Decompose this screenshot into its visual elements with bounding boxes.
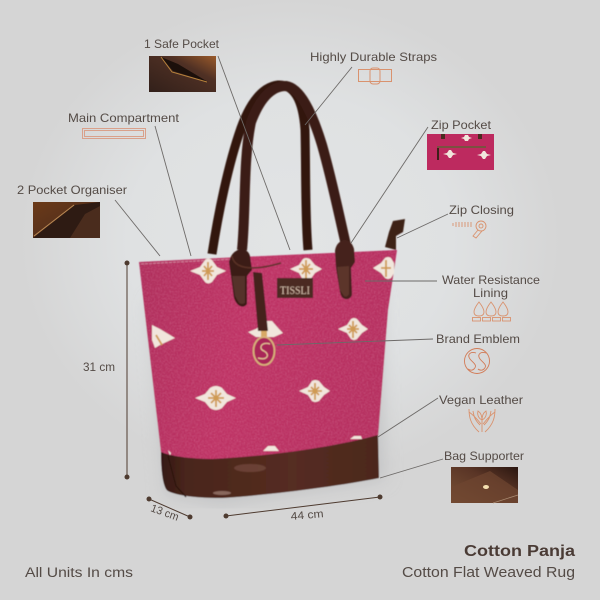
label: 2 Pocket Organiser: 2 Pocket Organiser xyxy=(17,183,127,197)
product title: Cotton Panja xyxy=(464,543,575,560)
front handle xyxy=(242,86,346,250)
zip pull xyxy=(385,219,405,250)
brand label xyxy=(277,278,313,298)
label: Main Compartment: Main Compartment xyxy=(68,111,180,125)
icon: hands and leaf xyxy=(469,409,495,432)
dimension: depth 13 cm xyxy=(146,496,192,520)
back handle xyxy=(212,85,308,254)
leather base xyxy=(161,435,379,498)
top seam xyxy=(141,259,235,264)
icon: water drops xyxy=(472,302,510,321)
label: Water Resistance Lining: Lining xyxy=(473,286,508,300)
label: Zip Closing: Zip Closing xyxy=(449,203,514,217)
label: Zip Pocket: Zip Pocket xyxy=(431,118,492,132)
text: 13 cm: 13 cm xyxy=(149,503,180,524)
brand label: TISSLI xyxy=(280,283,310,297)
right strap tab inner xyxy=(337,266,349,297)
icon: zipper xyxy=(453,221,486,238)
emblem ring xyxy=(254,331,274,365)
dimension: width 44 cm xyxy=(224,494,382,518)
dimension: height 31 cm xyxy=(124,260,130,480)
diamond motifs xyxy=(152,257,394,456)
text: 44 cm: 44 cm xyxy=(290,508,324,523)
label: Highly Durable Straps: Highly Durable Straps xyxy=(310,50,437,64)
thumbnail: bag supporter xyxy=(451,467,518,503)
icon: straps xyxy=(358,68,392,84)
bag illustration xyxy=(135,85,405,505)
label: Vegan Leather: Vegan Leather xyxy=(439,393,523,407)
bag shadow xyxy=(150,290,385,505)
base highlights xyxy=(234,464,266,472)
thumbnail: zip pocket xyxy=(427,134,494,170)
bag body fabric xyxy=(139,250,397,470)
right strap tab xyxy=(335,240,355,299)
label: Water Resistance Lining: Water Resistance xyxy=(442,273,540,287)
label: 1 Safe Pocket: 1 Safe Pocket xyxy=(144,37,220,51)
fabric weave texture xyxy=(135,248,400,473)
text: 31 cm: 31 cm xyxy=(83,362,115,374)
label: Brand Emblem: Brand Emblem xyxy=(436,332,520,346)
thumbnail: safe pocket xyxy=(149,56,216,92)
thumbnail: organiser xyxy=(33,202,100,238)
icon: brand emblem xyxy=(464,348,490,374)
footnote: All Units In cms xyxy=(25,565,133,580)
leader lines xyxy=(115,56,448,478)
product subtitle: Cotton Flat Weaved Rug xyxy=(402,565,575,581)
left strap tab inner xyxy=(232,276,245,304)
keyring strap xyxy=(253,272,268,331)
left strap tab xyxy=(229,249,252,307)
label: Bag Supporter: Bag Supporter xyxy=(444,449,524,463)
icon: compartment xyxy=(82,128,146,138)
label: Water Resistance Lining xyxy=(442,273,540,300)
strap tie xyxy=(232,256,281,268)
